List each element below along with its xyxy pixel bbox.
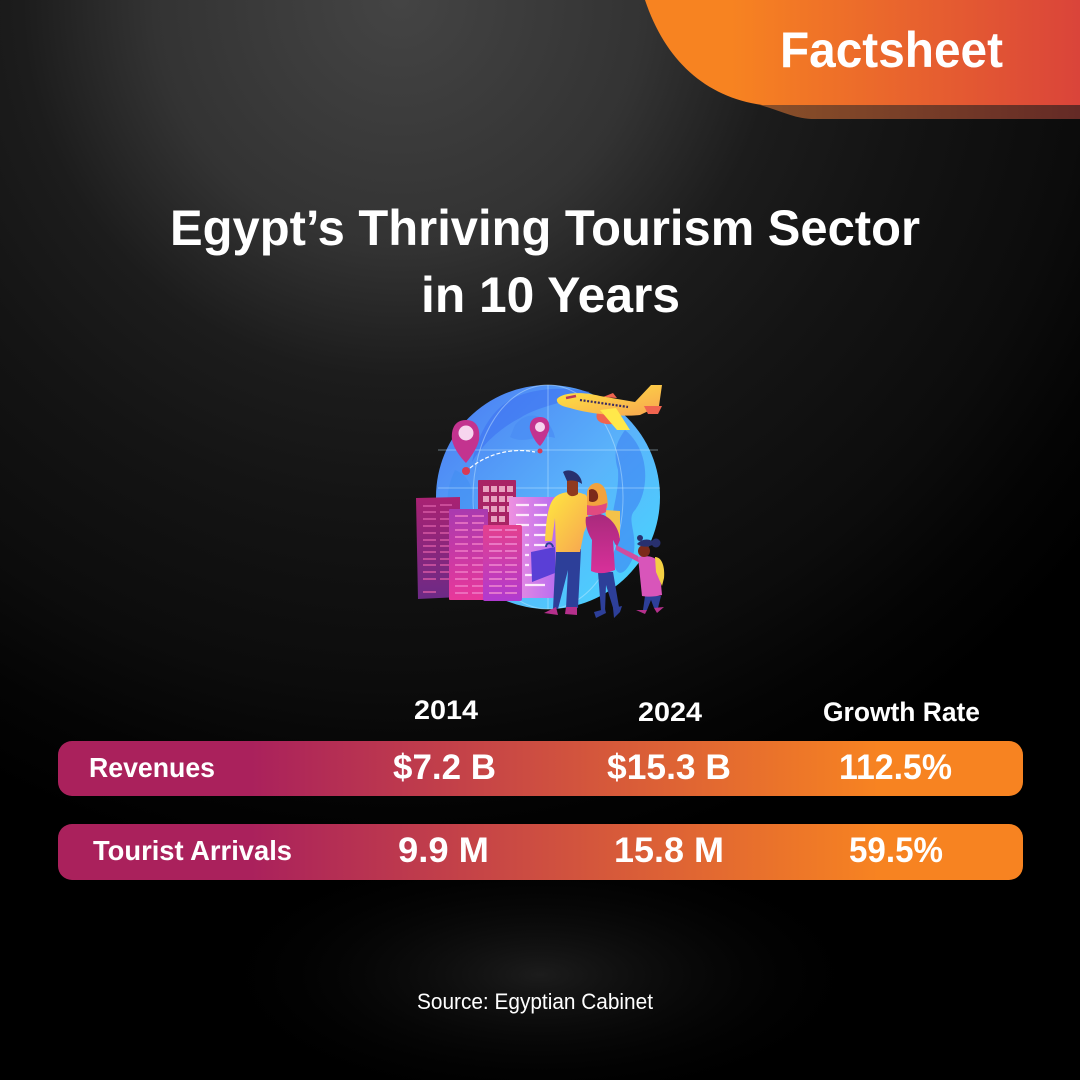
globe (436, 385, 660, 609)
table header: Growth Rate (823, 697, 980, 727)
row: revenues: $15.3 B (607, 748, 731, 787)
illustration: family travelling (416, 385, 664, 618)
table header: 2024 (638, 697, 702, 727)
source: Source: Egyptian Cabinet (417, 989, 653, 1014)
row: tourist arrivals: 9.9 M (398, 831, 489, 870)
location pin small (530, 417, 549, 454)
title: Egypt’s Thriving Tourism Sector (170, 200, 920, 256)
woman (586, 483, 622, 618)
factsheet label: Factsheet (780, 22, 1003, 78)
row: tourist arrivals: 15.8 M (614, 831, 724, 870)
row: tourist arrivals (58, 824, 1023, 880)
buildings (416, 480, 557, 601)
row: revenues: 112.5% (839, 748, 952, 787)
man (544, 470, 588, 615)
row: revenues (58, 741, 1023, 796)
row: tourist arrivals: 59.5% (849, 831, 943, 870)
location pin large (452, 420, 479, 475)
row: tourist arrivals: Tourist Arrivals (93, 835, 292, 866)
factsheet tab (645, 0, 1080, 119)
suitcase (531, 543, 555, 582)
title: in 10 Years (421, 267, 680, 323)
table header (414, 695, 980, 727)
table header: 2014 (414, 695, 478, 725)
row: revenues: Revenues (89, 752, 215, 783)
airplane (557, 385, 662, 430)
title (170, 200, 920, 323)
dashed route (470, 451, 535, 468)
row: revenues: $7.2 B (393, 748, 496, 787)
child (616, 535, 664, 614)
